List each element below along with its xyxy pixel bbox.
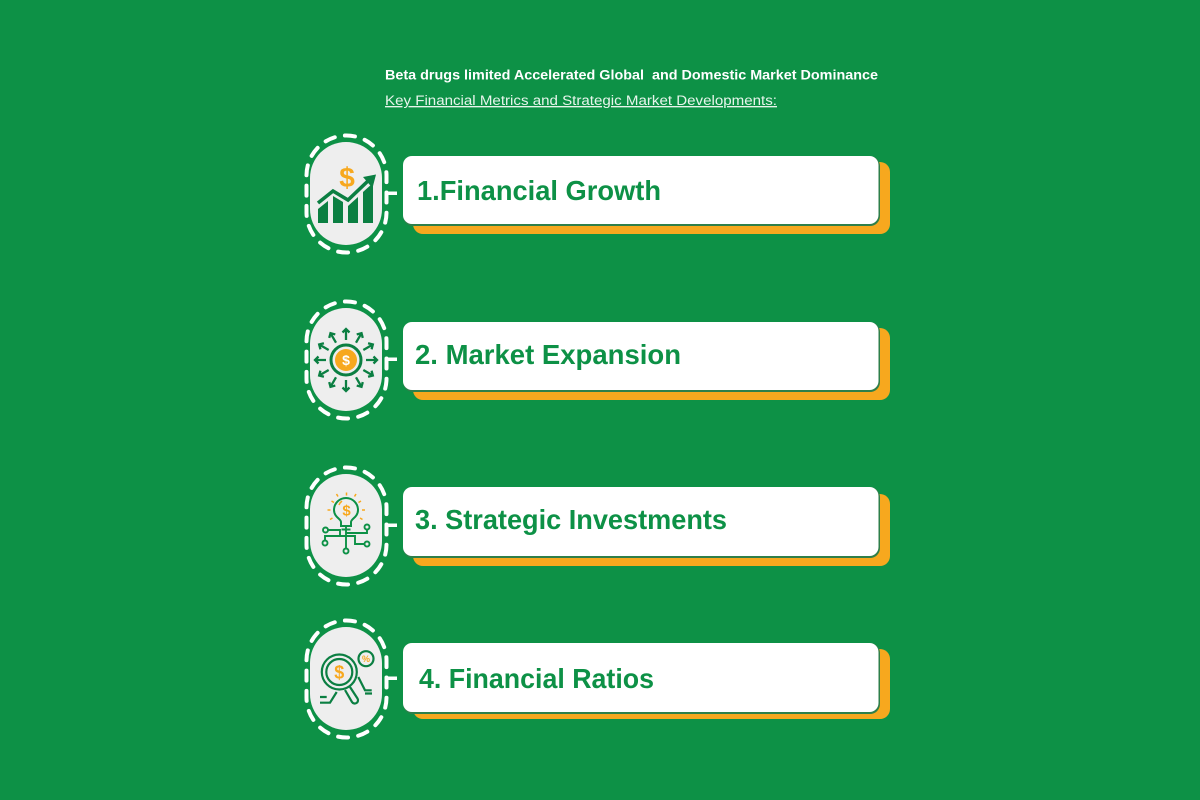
card 1: 1.Financial Growth [417, 175, 661, 206]
icon: magnifier with dollar: % [362, 654, 370, 664]
row 1: financial growth [306, 136, 890, 252]
card 2: 2. Market Expansion [415, 339, 681, 370]
card 2 [403, 322, 890, 400]
subtitle: Key Financial Metrics and Strategic Market Developments: [385, 93, 777, 108]
row 2: market expansion [306, 302, 890, 418]
icon: expansion arrows [306, 302, 397, 418]
row 4: financial ratios [306, 620, 890, 738]
icon: expansion arrows: $ [342, 352, 350, 368]
card 1 [403, 156, 890, 234]
card 4 [403, 643, 890, 719]
card 4: 4. Financial Ratios [419, 663, 654, 694]
icon: light bulb network: $ [342, 502, 351, 520]
title: Beta drugs limited Accelerated Global and Domestic Market Dominance [385, 68, 879, 82]
icon: magnifier with dollar: $ [334, 662, 344, 682]
row 3: strategic investments [306, 468, 890, 584]
icon: magnifier with dollar [306, 620, 397, 738]
card 3 [403, 487, 890, 566]
icon: growth chart [306, 136, 397, 252]
icon: light bulb network [306, 468, 397, 584]
card 3: 3. Strategic Investments [415, 504, 727, 535]
icon: growth chart: $ [339, 162, 355, 193]
